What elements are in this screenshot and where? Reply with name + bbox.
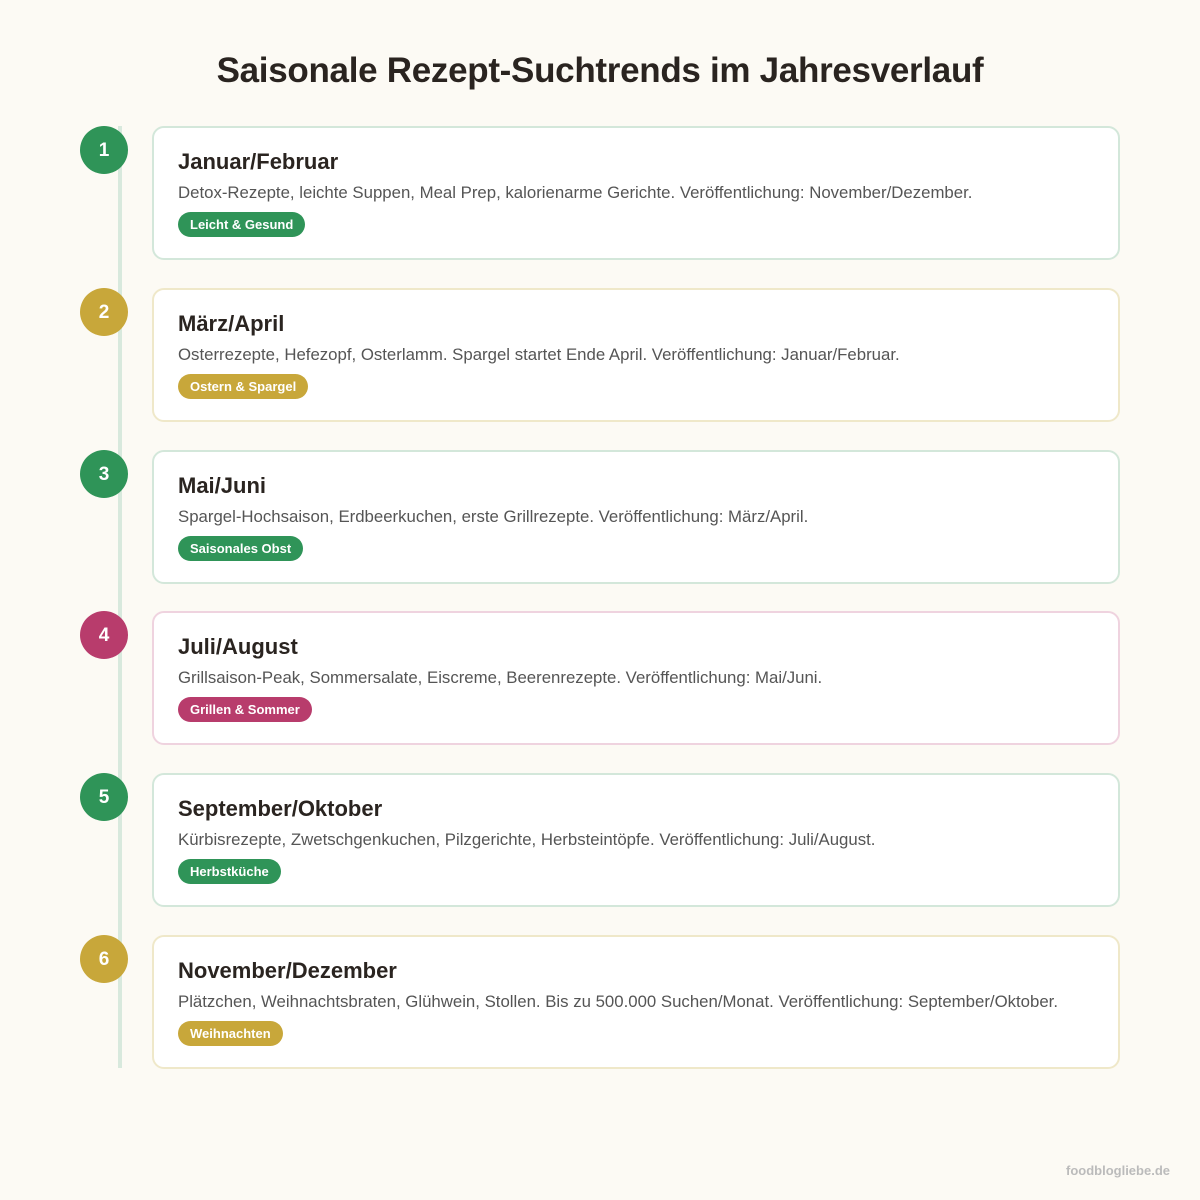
marker 3: 3	[99, 464, 109, 485]
marker 2: 2	[99, 302, 109, 323]
card: März/April: März/April	[178, 311, 284, 336]
marker 2	[80, 288, 128, 336]
card: September/Oktober: Kürbisrezepte, Zwetschgenkuchen, Pilzgerichte, Herbsteintöpfe. Veröffentlichung: Juli/August.	[178, 830, 875, 849]
card: September/Oktober	[152, 773, 1120, 907]
card: Juli/August	[152, 611, 1120, 745]
footer credit: foodblogliebe.de	[1066, 1163, 1170, 1178]
card: Juli/August: Grillsaison-Peak, Sommersalate, Eiscreme, Beerenrezepte. Veröffentlichung: Mai/Juni.	[178, 668, 822, 687]
marker 4	[80, 611, 128, 659]
card: Mai/Juni: Saisonales Obst	[190, 541, 291, 556]
marker 1: 1	[99, 140, 109, 161]
card: März/April	[152, 288, 1120, 422]
marker 3	[80, 450, 128, 498]
card: Mai/Juni	[152, 450, 1120, 584]
card: Juli/August: Juli/August	[178, 634, 298, 659]
marker 5	[80, 773, 128, 821]
card: November/Dezember: Plätzchen, Weihnachtsbraten, Glühwein, Stollen. Bis zu 500.000 Suchen/Monat. Veröffentlichung: September/Oktober.	[178, 992, 1058, 1011]
card: September/Oktober: September/Oktober	[178, 796, 382, 821]
card: Juli/August: Grillen & Sommer	[190, 702, 300, 717]
card: März/April: Ostern & Spargel	[190, 379, 296, 394]
marker 5: 5	[99, 787, 109, 808]
marker 6	[80, 935, 128, 983]
title: Saisonale Rezept-Suchtrends im Jahresverlauf	[217, 51, 983, 90]
marker 6: 6	[99, 949, 109, 970]
timeline line	[118, 126, 122, 1068]
card: Januar/Februar: Detox-Rezepte, leichte Suppen, Meal Prep, kalorienarme Gerichte. Veröffentlichung: November/Dezember.	[178, 183, 972, 202]
marker 1	[80, 126, 128, 174]
card: Januar/Februar: Leicht & Gesund	[190, 217, 293, 232]
card: November/Dezember	[152, 935, 1120, 1069]
card: Januar/Februar: Januar/Februar	[178, 149, 338, 174]
card: November/Dezember: November/Dezember	[178, 958, 397, 983]
card: Mai/Juni: Spargel-Hochsaison, Erdbeerkuchen, erste Grillrezepte. Veröffentlichung: März/April.	[178, 507, 808, 526]
card: November/Dezember: Weihnachten	[190, 1026, 271, 1041]
card: September/Oktober: Herbstküche	[190, 864, 269, 879]
card: Mai/Juni: Mai/Juni	[178, 473, 266, 498]
card: Januar/Februar	[152, 126, 1120, 260]
card: März/April: Osterrezepte, Hefezopf, Osterlamm. Spargel startet Ende April. Veröffentlichung: Januar/Februar.	[178, 345, 900, 364]
marker 4: 4	[99, 625, 109, 646]
